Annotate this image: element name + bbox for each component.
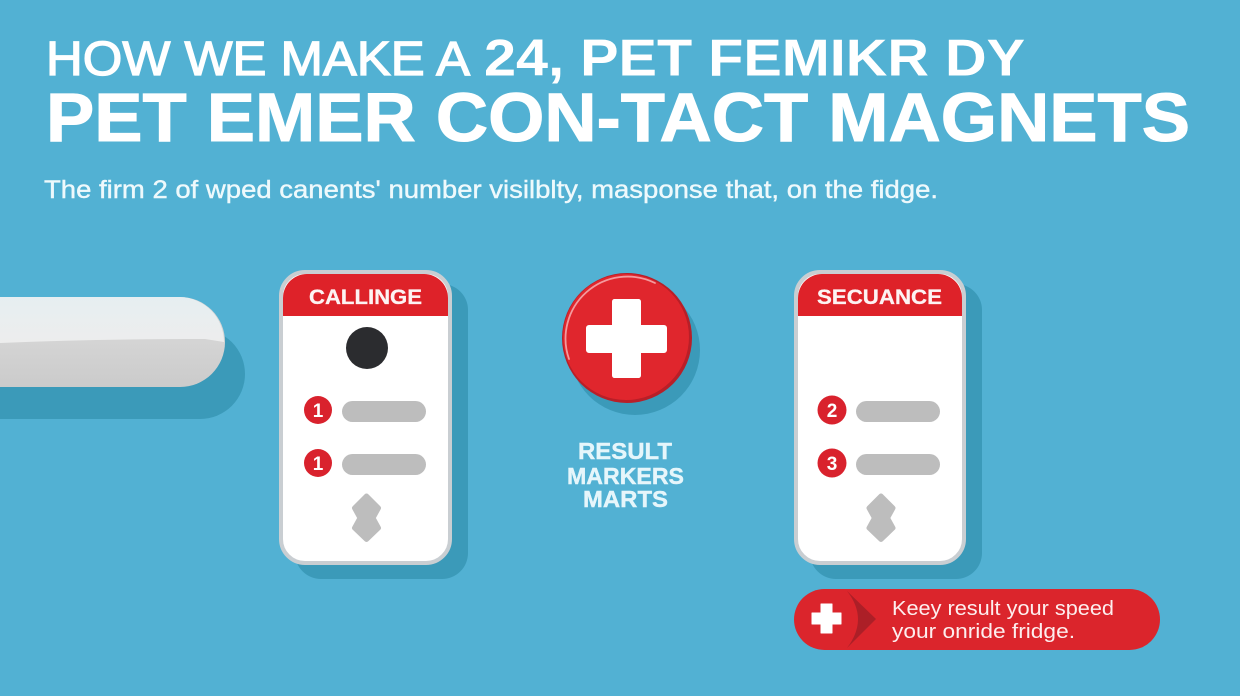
center label: MARTS: [583, 486, 668, 512]
panel: secuance card: [796, 272, 982, 579]
card header: CALLINGE: [309, 286, 422, 309]
center label: [567, 438, 684, 512]
list row 2: 2: [827, 401, 837, 422]
card header: [798, 274, 962, 316]
list row 3: 3: [827, 454, 837, 475]
callout text: Keey result your speed: [892, 598, 1114, 620]
list row 1: [304, 396, 426, 424]
icon: grey diamond connector: [354, 496, 378, 540]
title: HOW WE MAKE A: [46, 33, 470, 86]
center label: RESULT: [578, 438, 673, 464]
icon: red cross button: [562, 273, 700, 415]
callout: key result banner: [794, 589, 1160, 650]
list row 2: [304, 449, 426, 477]
card header: [283, 274, 448, 316]
panel: callinge card: [281, 272, 468, 579]
subtitle: The firm 2 of wped canents' number visilblty, masponse that, on the fidge.: [44, 176, 938, 204]
callout text: [892, 598, 1114, 643]
callout text: your onride fridge.: [892, 621, 1075, 643]
magnet bar illustration: [0, 297, 245, 419]
title: [46, 30, 1190, 156]
title: 24, PET FEMIKR DY: [484, 30, 1025, 88]
list row 2: 1: [313, 454, 324, 475]
card header: SECUANCE: [817, 286, 942, 309]
arrow: dark chevron: [847, 591, 876, 648]
list row 1: 1: [313, 401, 324, 422]
list row 3: [818, 448, 940, 478]
icon: black dot: [346, 327, 388, 369]
title: PET EMER CON-TACT MAGNETS: [46, 79, 1190, 156]
center label: MARKERS: [567, 463, 684, 489]
icon: grey diamond connector: [869, 496, 893, 540]
icon: white cross: [812, 604, 841, 633]
list row 2: [818, 396, 940, 424]
